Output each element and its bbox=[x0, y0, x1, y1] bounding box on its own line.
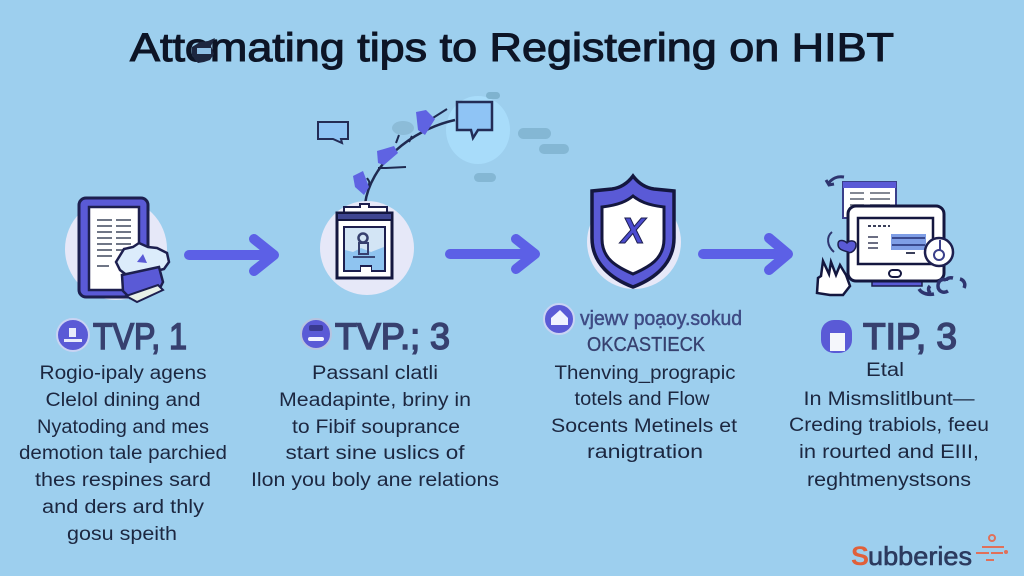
heading: tip 2: TVP.; 3 bbox=[335, 316, 450, 357]
text block: tip 1: Nyatoding and mes bbox=[37, 417, 209, 438]
text block: tip 1: Clelol dining and bbox=[46, 390, 200, 411]
text block: tip 2: to Fibif souprance bbox=[292, 417, 460, 438]
arrow 2 bbox=[450, 239, 535, 269]
heading: tip 4: TIP, 3 bbox=[863, 316, 957, 357]
icon: monitor and hand bbox=[817, 177, 965, 295]
text block: tip 1 bbox=[19, 363, 227, 545]
text block: tip 1: thes respines sard bbox=[35, 470, 211, 491]
text block: tip 3 bbox=[551, 363, 738, 463]
text block: tip 2: start sine uslics of bbox=[286, 443, 465, 464]
text block: tip 1: demotion tale parchied bbox=[19, 443, 227, 464]
arrow 1 bbox=[189, 239, 274, 271]
text block: tip 3: ranigtration bbox=[587, 442, 703, 463]
text block: tip 4: Etal bbox=[866, 360, 904, 381]
icon: tablet with document bbox=[65, 198, 169, 302]
text block: tip 1: and ders ard thly bbox=[42, 497, 205, 518]
icon: clipboard with puzzle bbox=[320, 201, 414, 295]
heading: tip 1: TVP, 1 bbox=[93, 316, 187, 357]
text block: tip 1: gosu speith bbox=[67, 524, 177, 545]
text block: tip 1: Rogio-ipaly agens bbox=[40, 363, 206, 384]
text block: tip 4: In Mismslitlbunt— bbox=[804, 389, 974, 410]
text block: tip 2: Meadapinte, briny in bbox=[279, 390, 471, 411]
text block: tip 4: reghtmenystsons bbox=[807, 470, 971, 491]
text block: tip 2: Ilon you boly ane relations bbox=[251, 470, 499, 491]
icon: shield bbox=[587, 176, 681, 289]
heading: tip 3: OKCASTIECK bbox=[587, 334, 706, 356]
icon: speech bubbles and branch bbox=[318, 92, 569, 204]
arrow 3 bbox=[703, 238, 788, 270]
text block: tip 4 bbox=[789, 360, 989, 491]
text block: tip 2 bbox=[251, 363, 499, 491]
title: Attomating tips to Registering on HIBT bbox=[130, 26, 894, 70]
text block: tip 4: Creding trabiols, feeu bbox=[789, 415, 989, 436]
heading: tip 3 bbox=[544, 304, 742, 356]
text block: tip 2: Passanl clatli bbox=[312, 363, 438, 384]
logo: ubberies bbox=[868, 541, 972, 571]
heading: tip 4 bbox=[821, 316, 957, 357]
heading: tip 3: vjewv poạoy.sokud bbox=[580, 308, 742, 330]
text block: tip 3: Socents Metinels et bbox=[551, 416, 738, 437]
heading: tip 1 bbox=[57, 316, 187, 357]
icon: shield: X bbox=[619, 210, 647, 251]
text block: tip 3: Thenving_prograpic bbox=[554, 363, 736, 384]
text block: tip 4: in rourted and EIII, bbox=[799, 442, 979, 463]
text block: tip 3: totels and Flow bbox=[574, 389, 710, 410]
logo: S bbox=[851, 541, 869, 571]
logo bbox=[851, 535, 1008, 571]
